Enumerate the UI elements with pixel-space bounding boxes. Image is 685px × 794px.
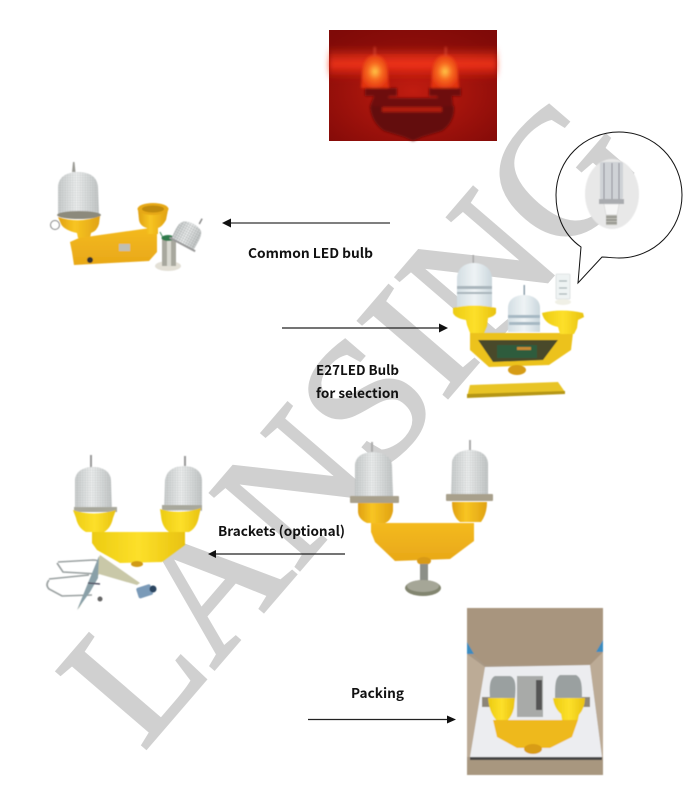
product: twin light with E27 LED bulb, open cover [453, 255, 584, 398]
label: Brackets (optional): Brackets (optional) [218, 520, 345, 540]
photo: red-lit twin obstruction light [329, 30, 497, 141]
arrow: to brackets option [208, 550, 345, 558]
arrow: to packing [308, 716, 456, 724]
product: twin light with pole mount [350, 440, 493, 596]
watermark: LANSING: LANSING [22, 60, 678, 777]
icon: E27 bulb [585, 159, 639, 229]
label: E27LED Bulb for selection: E27LED Bulb [316, 359, 399, 379]
photo: packing box [467, 608, 603, 775]
speech bubble with E27 LED bulb [556, 132, 682, 283]
label: Packing: Packing [351, 682, 404, 702]
label: E27LED Bulb for selection [316, 359, 399, 402]
arrow: to E27 light [282, 324, 448, 332]
arrow: to common LED bulb light [222, 218, 390, 228]
label: E27LED Bulb for selection: for selection [316, 382, 399, 402]
label: Common LED bulb: Common LED bulb [248, 242, 373, 262]
product: twin light with pole bracket [47, 455, 202, 610]
product: common LED bulb light with removed lens [50, 162, 206, 271]
